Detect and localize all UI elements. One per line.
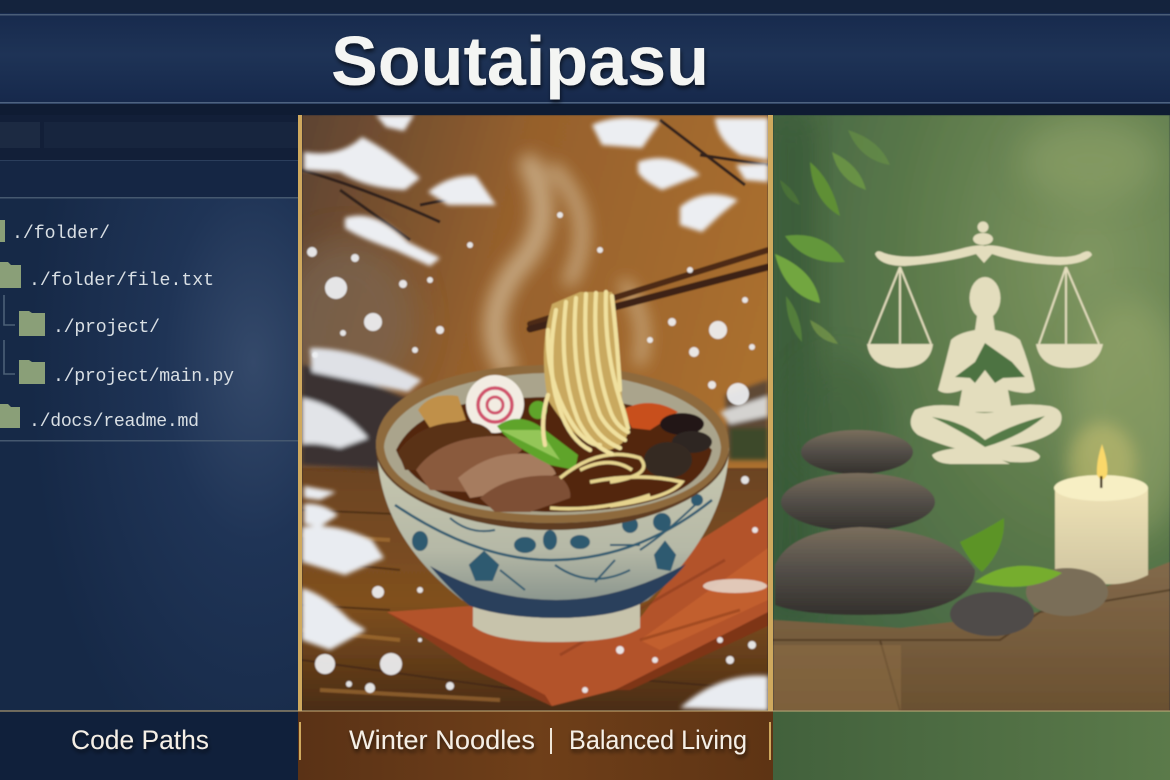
bowl floral pattern bbox=[395, 495, 712, 590]
napkin bbox=[387, 497, 768, 706]
path text: main: ./project/main.py bbox=[53, 367, 234, 387]
bowl blue band bbox=[430, 564, 686, 618]
carrot and mushrooms bbox=[622, 403, 712, 478]
gold frame around noodles panel bbox=[298, 115, 773, 711]
candle bbox=[1054, 423, 1148, 584]
noodle bowl bbox=[376, 365, 729, 642]
bowl body bbox=[377, 447, 729, 618]
left pan bbox=[867, 267, 933, 368]
title: Soutaipasu bbox=[331, 22, 709, 100]
panel: winter noodles illustration bbox=[275, 115, 768, 711]
icon: balance scale with meditating figure bbox=[867, 222, 1103, 464]
dark canopy shade bbox=[773, 115, 813, 615]
panel: balanced living illustration bbox=[773, 115, 1170, 711]
bowl foot bbox=[473, 600, 640, 642]
wooden table bbox=[302, 468, 768, 711]
header banner bbox=[0, 0, 1170, 115]
tree connector two bbox=[4, 340, 15, 374]
narutomaki bbox=[466, 375, 524, 433]
soup bbox=[396, 397, 712, 512]
pork slices bbox=[398, 422, 570, 512]
icon: folder file bbox=[0, 262, 21, 288]
loose noodles bbox=[550, 454, 682, 509]
icon: folder root bbox=[0, 220, 5, 242]
path text: project: ./project/ bbox=[53, 318, 160, 338]
snow clumps on branches bbox=[304, 115, 768, 266]
right pan bbox=[1036, 267, 1103, 368]
scale beam bbox=[875, 222, 1092, 266]
tempura bbox=[418, 395, 466, 428]
path text: folder: ./folder/ bbox=[12, 224, 110, 244]
tree connector one bbox=[4, 295, 15, 325]
footer caption bar bbox=[0, 710, 1170, 780]
bowl rim bbox=[376, 365, 729, 523]
caption divider bbox=[550, 728, 552, 754]
lifted noodles bbox=[543, 292, 629, 454]
steam bbox=[495, 165, 643, 365]
green leaves by stones bbox=[960, 518, 1062, 587]
caption: winter noodles: Winter Noodles bbox=[349, 725, 535, 755]
left snow piles bbox=[302, 486, 768, 711]
path text: docs: ./docs/readme.md bbox=[29, 412, 199, 432]
icon: folder docs bbox=[0, 404, 20, 428]
path text: file: ./folder/file.txt bbox=[29, 271, 214, 291]
dark left rock with snow bbox=[302, 348, 422, 470]
meditating figure bbox=[911, 277, 1062, 464]
bowl interior bbox=[376, 368, 728, 520]
scallions bbox=[497, 401, 578, 470]
stone ledge bbox=[773, 562, 1170, 711]
leaves bbox=[775, 130, 890, 344]
right ledge with snow bbox=[720, 380, 768, 460]
caption: code paths: Code Paths bbox=[71, 725, 209, 755]
panel: code paths bbox=[0, 110, 298, 711]
balancing stones bbox=[775, 430, 1108, 636]
bowl front rim shade bbox=[376, 450, 729, 530]
icon: folder main bbox=[19, 360, 45, 384]
caption: balanced living: Balanced Living bbox=[569, 725, 747, 755]
soft light patches bbox=[1070, 300, 1170, 540]
grey haze behind bowl bbox=[302, 234, 419, 378]
icon: folder project bbox=[19, 311, 45, 336]
branches bbox=[302, 120, 768, 240]
falling snow bbox=[307, 212, 758, 693]
chopsticks bbox=[530, 250, 768, 329]
